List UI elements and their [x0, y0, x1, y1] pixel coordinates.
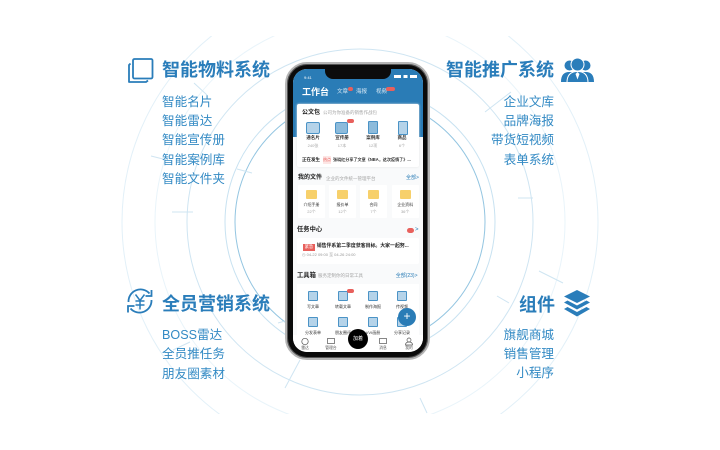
- tools card: 传视频: [396, 304, 408, 309]
- card: 公文包: 17本: [338, 143, 346, 148]
- tab labels: 雷达: [301, 346, 309, 350]
- tools card: 转载文章: [335, 304, 351, 309]
- bottom tab bar: 消息: [379, 346, 387, 350]
- folder card: [392, 185, 419, 218]
- tools card: VVI画册: [366, 330, 380, 335]
- card: 公文包: 张晓红分享了文章《NBA，这次疫情了》...: [333, 157, 411, 162]
- feature list: 小程序: [516, 366, 554, 380]
- feature list: 旗舰商城: [504, 328, 554, 342]
- heading: 我的文件: 我的文件: [298, 175, 322, 181]
- heading: 智能推广系统: [446, 60, 554, 80]
- tab icons: [302, 338, 413, 346]
- panel: 全员营销系统: [127, 288, 270, 381]
- panel: 智能物料系统: [128, 58, 270, 186]
- background rings: [122, 36, 598, 414]
- tools card: 朋友圈评: [335, 330, 351, 335]
- center tab button: [348, 329, 368, 349]
- task card: [297, 238, 419, 264]
- badge: [407, 228, 414, 232]
- panel: 智能推广系统: [446, 58, 594, 167]
- folder card: [329, 185, 356, 218]
- feature list: 品牌海报: [504, 114, 554, 128]
- floating add button: [398, 308, 416, 326]
- card: 公文包: 12项: [369, 143, 377, 148]
- card: 公文包: [297, 104, 419, 167]
- tool icons: [308, 291, 318, 301]
- tools card: 分发表单: [305, 330, 321, 335]
- feature list: 智能名片: [162, 94, 212, 108]
- subtitle: 服务定制你的日常工具: [318, 273, 363, 278]
- task date: ◷ 04-22 09:00 至 04-26 24:00: [302, 252, 356, 257]
- feature list: 智能文件夹: [162, 172, 225, 186]
- card: 公文包: 公司为你准备的销售作战包: [323, 110, 377, 115]
- heading: 全员营销系统: [162, 294, 270, 314]
- link: 全部(23)>: [396, 273, 418, 279]
- card: 公文包: 热点: [323, 157, 331, 162]
- folder card: 7个: [370, 209, 377, 214]
- card: 公文包: 6个: [399, 143, 405, 148]
- feature list: 表单系统: [504, 153, 554, 167]
- feature list: 全员推任务: [162, 347, 225, 361]
- feature list: 智能案例库: [162, 153, 225, 167]
- app header: 海报: [356, 89, 367, 95]
- tag: [303, 244, 315, 251]
- folder card: 22个: [307, 209, 316, 214]
- feature list: [162, 328, 225, 381]
- tool counts: 240张: [308, 143, 318, 148]
- tool labels: 通名片: [306, 135, 320, 140]
- folder card: 报价单: [336, 202, 348, 207]
- icon: layers: [564, 290, 590, 316]
- link: 全部>: [406, 175, 419, 181]
- status time: 9:41: [304, 75, 312, 80]
- icon: copy squares: [128, 58, 154, 83]
- feature list: BOSS雷达: [162, 328, 222, 342]
- icon: yuan cycle: [127, 288, 152, 314]
- status icons: [394, 75, 417, 78]
- badge: [347, 289, 354, 293]
- badge: hot: [386, 87, 395, 91]
- card: 公文包: 案例库: [366, 135, 380, 140]
- app header: 视频: [376, 89, 387, 95]
- tag: 紧急: [305, 244, 313, 249]
- tool icons: [306, 122, 320, 134]
- header title: 工作台: [302, 87, 329, 97]
- tools card: 制作海报: [365, 304, 381, 309]
- folder card: 介绍手册: [304, 202, 320, 207]
- badge: [348, 86, 353, 90]
- badge: [347, 119, 354, 123]
- feature list: 智能雷达: [162, 114, 212, 128]
- heading: 智能物料系统: [162, 60, 270, 80]
- app header: [293, 69, 423, 137]
- heading: 工具箱: 工具箱: [297, 272, 316, 279]
- card: 公文包: 宣传册: [335, 135, 349, 140]
- folder card: 12个: [338, 209, 347, 214]
- arrow: >: [415, 227, 419, 233]
- subtitle: 企业的文件统一管理平台: [326, 176, 376, 180]
- folder card: 36个: [401, 209, 409, 214]
- header tabs: 文章: [337, 89, 348, 95]
- folder card: 合同: [370, 202, 378, 207]
- heading: 任务中心: 任务中心: [297, 226, 322, 233]
- news ticker: 正在发生: [302, 157, 320, 162]
- folder card: [298, 185, 325, 218]
- feature list: [162, 94, 225, 186]
- card heading: 公文包: [302, 110, 320, 116]
- center tab button: 加着: [353, 336, 363, 342]
- heading: 组件: [519, 295, 555, 315]
- feature list: [491, 94, 554, 167]
- feature list: [504, 328, 554, 380]
- feature list: 带货短视频: [491, 133, 554, 147]
- feature list: 朋友圈素材: [162, 367, 225, 381]
- icon: team: [561, 58, 594, 82]
- card: 公文包: 商品: [398, 135, 406, 140]
- panel: 组件: [504, 290, 590, 380]
- bottom tab bar: 我的: [405, 346, 413, 350]
- feature list: 销售管理: [504, 347, 554, 361]
- phone frame: [285, 62, 430, 360]
- feature list: 智能宣传册: [162, 133, 225, 147]
- task text: 销售伴系第二季度获客目标。大家一起努...: [317, 244, 409, 249]
- tool labels: 写文章: [307, 304, 319, 309]
- tools card: [297, 284, 419, 335]
- notch: [325, 69, 391, 79]
- feature list: 企业文库: [504, 94, 554, 108]
- phone screen: [293, 69, 423, 352]
- phone mockup: [285, 62, 430, 360]
- folder card: 企业资料: [397, 202, 413, 207]
- bottom tab bar: 管理台: [325, 346, 337, 350]
- floating add button: +: [403, 309, 410, 323]
- tools card: 分享记录: [394, 330, 410, 335]
- bottom tab bar: [293, 335, 423, 352]
- folder card: [360, 185, 387, 218]
